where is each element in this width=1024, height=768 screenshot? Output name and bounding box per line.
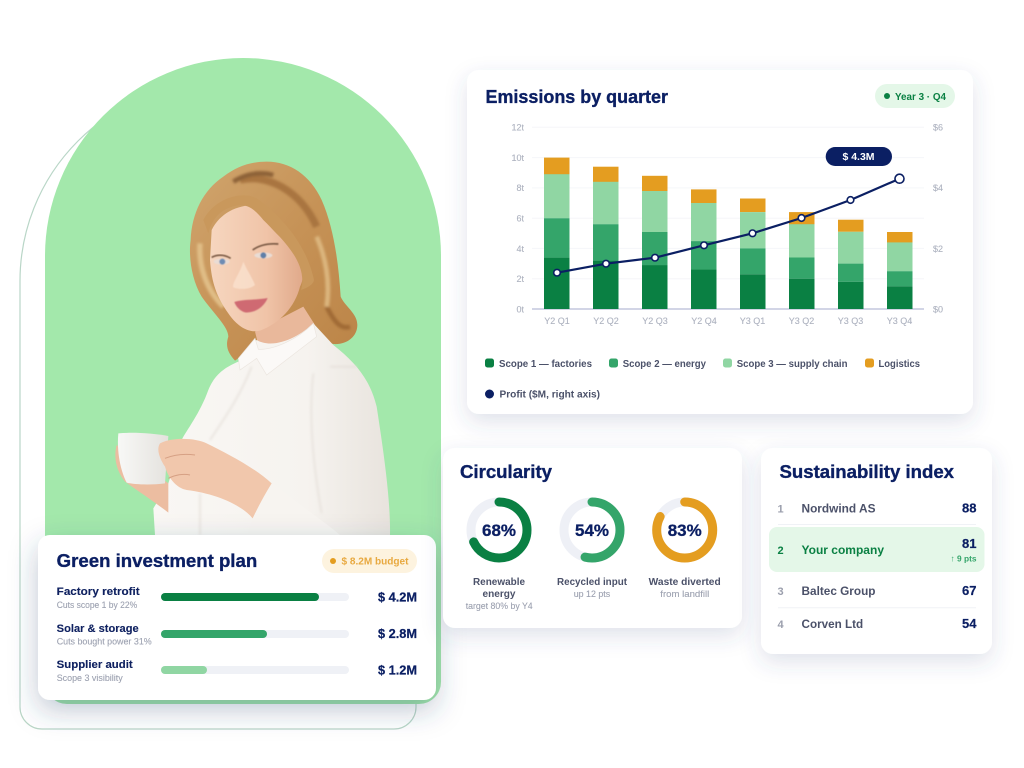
far hand behind cup [115,445,168,513]
period pill [875,84,955,108]
x axis labels [544,316,912,326]
row: factory retrofit: Cuts scope 1 by 22% [57,600,137,610]
callout: latest profit: $ 4.3M [842,152,874,163]
row: Nordwind AS: 88 [962,500,976,516]
hair shading [200,173,350,327]
left axis labels: 10t [511,153,524,163]
row: your company (highlighted): 2 [778,545,784,557]
donut: renewable energy: target 80% by Y4 [466,601,533,611]
right axis labels: $0 [933,304,943,314]
legend [485,358,920,400]
donut: recycled input: Recycled input [557,577,628,588]
donut: renewable energy [466,502,533,611]
row: Nordwind AS [778,500,976,516]
outline frame behind arch [20,83,416,729]
row: Nordwind AS: Nordwind AS [802,502,876,516]
right axis labels [933,122,943,314]
legend: Scope 3 — supply chain [737,359,848,370]
row: your company (highlighted): Your company [802,543,884,557]
donut: renewable energy: Renewable [473,577,525,588]
donut: waste diverted: 83% [668,521,702,540]
left axis labels: 12t [511,122,524,132]
right axis labels: $6 [933,122,943,132]
legend: Scope 1 — factories [499,359,592,370]
x axis labels: Y3 Q4 [887,316,912,326]
sleeve cuff [247,483,340,535]
x axis labels: Y3 Q3 [838,316,863,326]
row: supplier audit [57,659,417,683]
row: Corven Ltd: 4 [778,619,784,631]
shirt folds [200,367,357,535]
left axis labels: 2t [516,274,524,284]
row: supplier audit: $ 1.2M [378,663,417,678]
row: Corven Ltd: Corven Ltd [802,617,863,631]
row: solar and storage: Cuts bought power 31% [57,636,152,646]
near hand and forearm [158,439,272,518]
donut: waste diverted [649,502,721,599]
legend: Scope 2 — energy [623,359,706,370]
hair [190,162,357,361]
left axis labels: 4t [516,244,524,254]
callout: latest profit [826,147,892,166]
row: solar and storage: Solar & storage [57,623,139,635]
donut: waste diverted: Waste diverted [649,577,721,588]
panel: circularity [443,448,742,628]
period pill: Year 3 · Q4 [895,92,946,103]
row: factory retrofit: Factory retrofit [57,586,140,598]
donut: renewable energy: energy [482,589,516,600]
left eye [212,255,231,265]
budget pill: $ 8.2M budget [342,556,409,568]
green arch backdrop [45,58,441,704]
right axis labels: $4 [933,183,943,193]
face [210,205,303,331]
photo: woman holding a cup [115,162,390,535]
row: your company (highlighted) [769,527,984,572]
right axis labels: $2 [933,244,943,254]
row: Nordwind AS: 1 [778,504,784,516]
cup [118,433,168,484]
row: supplier audit: Supplier audit [57,659,133,671]
row: factory retrofit [57,586,417,610]
left axis labels: 8t [516,183,524,193]
x axis labels: Y2 Q2 [593,316,619,326]
row: Baltec Group: 3 [778,586,784,598]
row: factory retrofit: $ 4.2M [378,590,417,605]
right eye [253,244,278,258]
x axis labels: Y2 Q4 [691,316,717,326]
row: solar and storage: $ 2.8M [378,626,417,641]
x axis labels: Y2 Q1 [544,316,570,326]
x axis labels: Y2 Q3 [642,316,668,326]
shirt [153,323,390,535]
row: Corven Ltd [778,616,977,631]
collar [238,323,317,375]
row: Baltec Group [778,583,976,598]
donut: recycled input [557,502,628,599]
left axis labels [511,122,524,314]
lips [234,298,268,312]
row: Corven Ltd: 54 [962,616,977,631]
x axis labels: Y3 Q2 [789,316,814,326]
budget pill [322,549,417,573]
x axis labels: Y3 Q1 [740,316,765,326]
left axis labels: 0t [516,304,524,314]
legend: Profit ($M, right axis) [500,390,600,400]
row: Baltec Group: Baltec Group [802,584,876,598]
panel: green investment plan [38,535,436,700]
row: supplier audit: Scope 3 visibility [57,673,123,683]
row: your company (highlighted): ↑ 9 pts [950,554,977,564]
finger lines [165,454,195,478]
heading: green investment plan: Green investment plan [57,551,257,571]
donut: waste diverted: from landfill [660,589,709,599]
legend: Logistics [878,359,920,370]
donut: recycled input: up 12 pts [574,589,611,599]
row: Baltec Group: 67 [962,583,976,598]
row: solar and storage [57,623,417,646]
left axis labels: 6t [516,214,524,224]
profit line [554,174,904,276]
panel: sustainability index [761,448,992,654]
nose [233,262,255,289]
donut: renewable energy: 68% [482,521,516,540]
hair strand over face [203,195,314,290]
heading: emissions by quarter: Emissions by quarter [486,87,668,107]
bars [544,158,912,309]
heading: sustainability index: Sustainability index [780,462,954,482]
donut: recycled input: 54% [575,521,609,540]
panel: emissions by quarter [467,70,973,414]
neck [255,307,315,352]
chart: stacked bars with profit line [511,122,943,326]
heading: circularity: Circularity [460,462,552,482]
row: your company (highlighted): 81 [962,536,976,551]
